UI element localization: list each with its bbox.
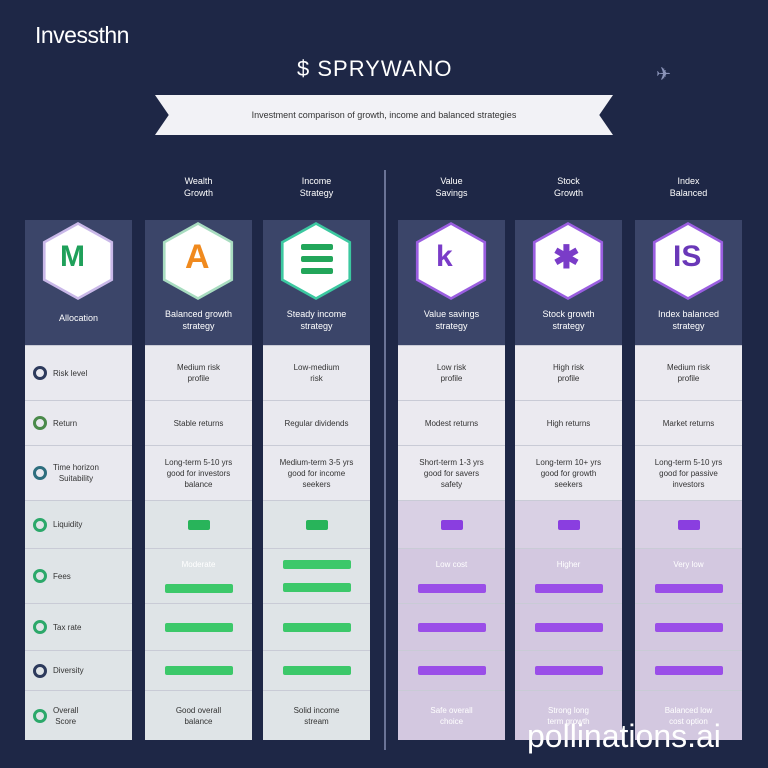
banner: Investment comparison of growth, income and balanced strategies: [252, 110, 516, 120]
panel: column 5: High risk: [553, 363, 584, 372]
panel: label column: Liquidity: [53, 520, 82, 529]
panel: column 5: Strong long: [548, 706, 589, 714]
panel: label column: Risk level: [53, 368, 87, 378]
panel: column 2: strategy: [182, 321, 214, 331]
panel: column 6: good for passive: [659, 468, 718, 478]
panel: column 3: good for income: [288, 468, 345, 478]
panel: column 2: Medium risk: [177, 363, 220, 372]
title: $ SPRYWANO: [297, 56, 452, 81]
panel: column 2: A: [185, 238, 210, 276]
panel: column 5: Stock growth: [542, 309, 595, 319]
column headers: Balanced: [670, 188, 707, 198]
panel: column 3: strategy: [300, 321, 332, 331]
panel: column 4: strategy: [435, 321, 468, 331]
column headers: Stock: [557, 176, 580, 186]
panel: column 4: Modest returns: [425, 418, 478, 428]
panel: column 5: [515, 220, 622, 740]
panel: column 4: choice: [440, 716, 463, 726]
panel: label column: Suitability: [59, 474, 93, 483]
panel: column 3: Medium-term 3-5 yrs: [280, 458, 353, 466]
panel: label column: Time horizon: [53, 463, 99, 472]
panel: column 3: Steady income: [287, 309, 346, 319]
panel: column 3: stream: [304, 716, 329, 726]
panel: column 4: profile: [441, 374, 462, 383]
panel: column 2: profile: [188, 374, 209, 383]
panel: column 6: Index balanced: [658, 309, 719, 319]
column headers: Savings: [435, 188, 468, 198]
panel: label column: Allocation: [59, 313, 98, 323]
column headers: Strategy: [300, 188, 333, 198]
column headers: [184, 176, 707, 198]
panel: column 6: IS: [673, 240, 701, 273]
column headers: Index: [677, 176, 700, 186]
icon: bird: ✈: [656, 64, 671, 84]
panel: column 6: [635, 220, 742, 740]
panel: column 3: risk: [310, 374, 323, 383]
panel: label column: Tax rate: [53, 622, 81, 632]
panel: column 3: Solid income: [294, 706, 339, 714]
panel: column 2: good for investors: [167, 468, 230, 478]
column headers: Income: [302, 176, 331, 186]
panel: column 3: seekers: [302, 480, 330, 488]
column headers: Wealth: [185, 176, 212, 186]
panel: column 2: [145, 220, 252, 740]
panel: column 5: strategy: [552, 321, 584, 331]
panel: column 5: Long-term 10+ yrs: [536, 458, 601, 466]
panel: column 2: Long-term 5-10 yrs: [165, 458, 232, 466]
panel: column 3: [263, 220, 370, 740]
panel: column 4: Low cost: [436, 560, 467, 569]
panel: column 5: High returns: [547, 418, 590, 428]
panel: label column: Overall: [53, 706, 78, 714]
panel: column 2: Moderate: [182, 560, 215, 569]
panel: column 2: balance: [184, 480, 213, 488]
panel: column 2: Balanced growth: [165, 309, 232, 319]
panel: column 6: strategy: [672, 321, 704, 331]
divider: [384, 170, 386, 750]
panel: label column: M: [60, 240, 85, 273]
panel: column 3: Regular dividends: [284, 418, 349, 428]
panel: column 5: seekers: [554, 480, 582, 488]
panel: column 6: Market returns: [663, 418, 714, 428]
logo: Invessthn: [35, 22, 129, 48]
column headers: Growth: [554, 188, 583, 198]
panel: column 4: Short-term 1-3 yrs: [419, 458, 484, 466]
watermark: pollinations.ai: [527, 718, 721, 754]
panel: column 4: safety: [441, 480, 462, 488]
panel: column 6: Balanced low: [665, 706, 712, 714]
panel: column 6: Very low: [673, 560, 704, 569]
panel: label column: Return: [53, 418, 77, 428]
panel: label column: Diversity: [53, 666, 84, 675]
panel: column 2: Good overall: [176, 706, 221, 714]
panel: column 6: profile: [678, 374, 699, 383]
panel: column 5: Higher: [557, 560, 580, 569]
panel: column 4: k: [436, 240, 453, 273]
panel: label column: Fees: [53, 572, 71, 580]
panel: column 2: balance: [184, 716, 212, 726]
panel: column 4: Value savings: [424, 309, 479, 319]
panel: column 4: Safe overall: [430, 706, 473, 714]
panel: column 6: Long-term 5-10 yrs: [655, 458, 722, 466]
panel: column 6: Medium risk: [667, 363, 710, 372]
column headers: Value: [440, 176, 463, 186]
panel: column 5: profile: [558, 374, 579, 383]
panel: column 5: ✱: [553, 239, 580, 275]
panel: column 4: [398, 220, 505, 740]
panel: column 4: good for savers: [424, 468, 479, 478]
panel: column 3: Low-medium: [294, 363, 339, 372]
banner: [155, 95, 613, 135]
panel: label column: [25, 220, 132, 740]
panel: column 2: Stable returns: [174, 418, 223, 428]
column headers: Growth: [184, 188, 213, 198]
panel: column 5: good for growth: [541, 468, 596, 478]
panel: column 6: cost option: [669, 716, 708, 726]
panel: column 6: investors: [672, 480, 704, 488]
panel: label column: Score: [55, 716, 76, 726]
panel: column 5: term growth: [547, 716, 590, 726]
panel: column 4: Low risk: [437, 363, 466, 372]
